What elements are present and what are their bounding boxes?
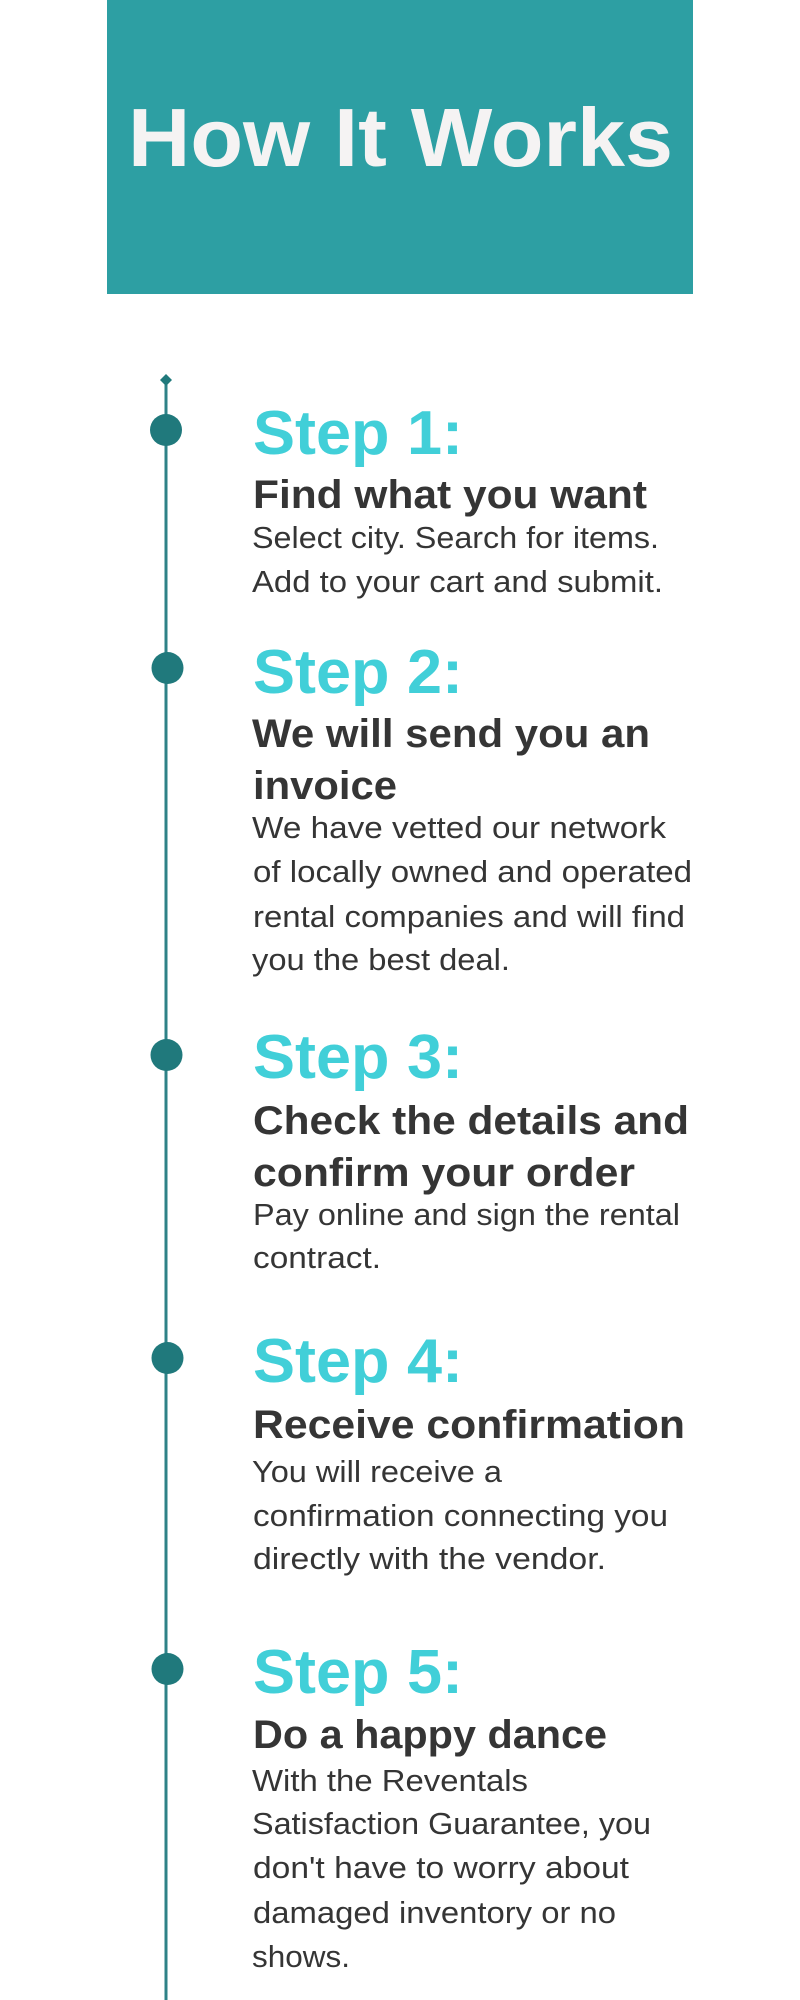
panel: step 5: Do a happy dance — [253, 1713, 607, 1757]
title banner — [107, 0, 693, 294]
timeline — [150, 374, 184, 2000]
panel: step 1: Find what you want — [253, 473, 647, 517]
panel: step 3: Step 3: — [253, 1023, 463, 1092]
panel: step 2: of locally owned and operated — [253, 854, 692, 889]
panel: step 2: We have vetted our network — [252, 810, 667, 845]
panel: step 3: Check the details and — [253, 1099, 689, 1143]
panel: step 5: With the Reventals — [252, 1763, 528, 1798]
panel: step 3: confirm your order — [253, 1151, 635, 1195]
panel: step 4: directly with the vendor. — [253, 1541, 606, 1576]
title: How It Works — [128, 91, 673, 184]
panel: step 3: Pay online and sign the rental — [253, 1197, 680, 1232]
panel: step 3: contract. — [253, 1240, 381, 1275]
panel: step 2 — [252, 638, 692, 977]
panel: step 2: We will send you an — [252, 712, 650, 756]
panel: step 3 — [253, 1023, 689, 1275]
panel: step 4: Receive confirmation — [253, 1403, 685, 1447]
panel: step 4: You will receive a — [252, 1454, 503, 1489]
panel: step 2: invoice — [253, 764, 397, 808]
panel: step 5: don't have to worry about — [253, 1850, 629, 1885]
panel: step 5: Satisfaction Guarantee, you — [252, 1806, 651, 1841]
panel: step 4: confirmation connecting you — [253, 1498, 668, 1533]
panel: step 2: Step 2: — [253, 638, 463, 707]
panel: step 1: Select city. Search for items. — [252, 520, 659, 555]
panel: step 4 — [252, 1327, 685, 1576]
panel: step 1 — [252, 399, 663, 599]
panel: step 5: Step 5: — [253, 1638, 463, 1707]
panel: step 5 — [252, 1638, 651, 1974]
panel: step 5: shows. — [252, 1939, 350, 1974]
panel: step 1: Step 1: — [253, 399, 463, 468]
panel: step 2: rental companies and will find — [253, 899, 685, 934]
panel: step 1: Add to your cart and submit. — [252, 564, 663, 599]
panel: step 2: you the best deal. — [252, 942, 510, 977]
panel: step 4: Step 4: — [253, 1327, 463, 1396]
panel: step 5: damaged inventory or no — [253, 1895, 616, 1930]
